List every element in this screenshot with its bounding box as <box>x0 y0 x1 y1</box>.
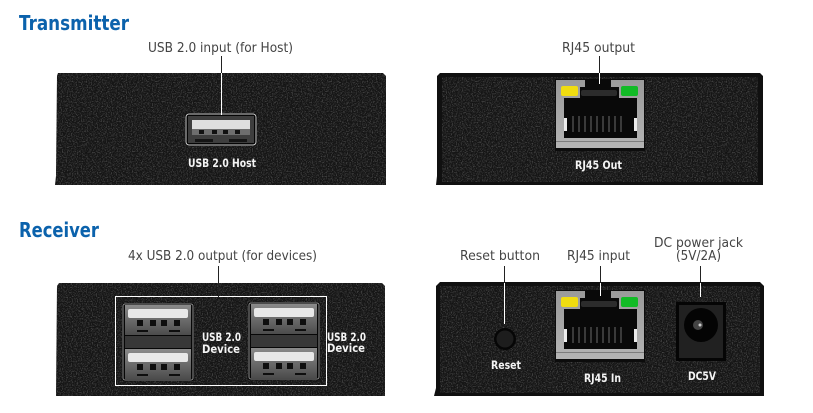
label: Reset: Reset <box>491 358 521 372</box>
icon: right USB ports <box>248 302 320 380</box>
caption: 4x USB 2.0 output: 4x USB 2.0 output (for devices) <box>128 248 317 264</box>
label: right USB 2.0 Device <box>327 330 366 355</box>
label: left USB 2.0 Device: USB 2.0 <box>202 330 241 344</box>
caption: DC power jack: (5V/2A) <box>676 248 721 264</box>
label: RJ45 Out: RJ45 Out <box>575 158 622 172</box>
caption: RJ45 input: RJ45 input <box>567 248 630 264</box>
caption: DC power jack: DC power jack <box>654 235 743 251</box>
icon: USB host port <box>185 113 257 146</box>
label: left USB 2.0 Device: Device <box>202 342 240 356</box>
heading: Transmitter: Transmitter <box>19 11 129 35</box>
heading: Receiver: Receiver <box>19 218 99 242</box>
label: right USB 2.0 Device: Device <box>327 341 365 355</box>
caption: Reset button: Reset button <box>460 248 540 264</box>
icon: left USB ports <box>122 303 194 381</box>
caption: USB 2.0 input: USB 2.0 input (for Host) <box>148 40 293 56</box>
panel: transmitter RJ45 side <box>436 73 763 185</box>
pointer: USB input <box>220 56 222 115</box>
icon: RJ45 output port <box>555 79 645 151</box>
panel: receiver RJ45 side <box>434 282 764 396</box>
panel: receiver USB side <box>56 283 385 396</box>
pointer: USB outputs <box>218 266 220 297</box>
pointer: DC jack <box>700 266 702 297</box>
pointer: reset <box>504 266 506 324</box>
panel: transmitter USB side <box>55 73 386 185</box>
caption: RJ45 output: RJ45 output <box>562 40 635 56</box>
icon: RJ45 input port <box>555 290 645 362</box>
pointer: RJ45 input <box>600 266 602 296</box>
label: DC5V: DC5V <box>688 369 716 383</box>
label: USB 2.0 Host: USB 2.0 Host <box>188 156 256 170</box>
callout frame <box>116 296 326 386</box>
pointer: RJ45 output <box>598 56 600 84</box>
icon: reset button <box>494 328 516 350</box>
label: right USB 2.0 Device: USB 2.0 <box>327 330 366 344</box>
caption: DC power jack <box>654 235 743 264</box>
icon: DC power jack <box>676 302 726 361</box>
label: left USB 2.0 Device <box>202 330 241 356</box>
label: RJ45 In: RJ45 In <box>584 371 621 385</box>
